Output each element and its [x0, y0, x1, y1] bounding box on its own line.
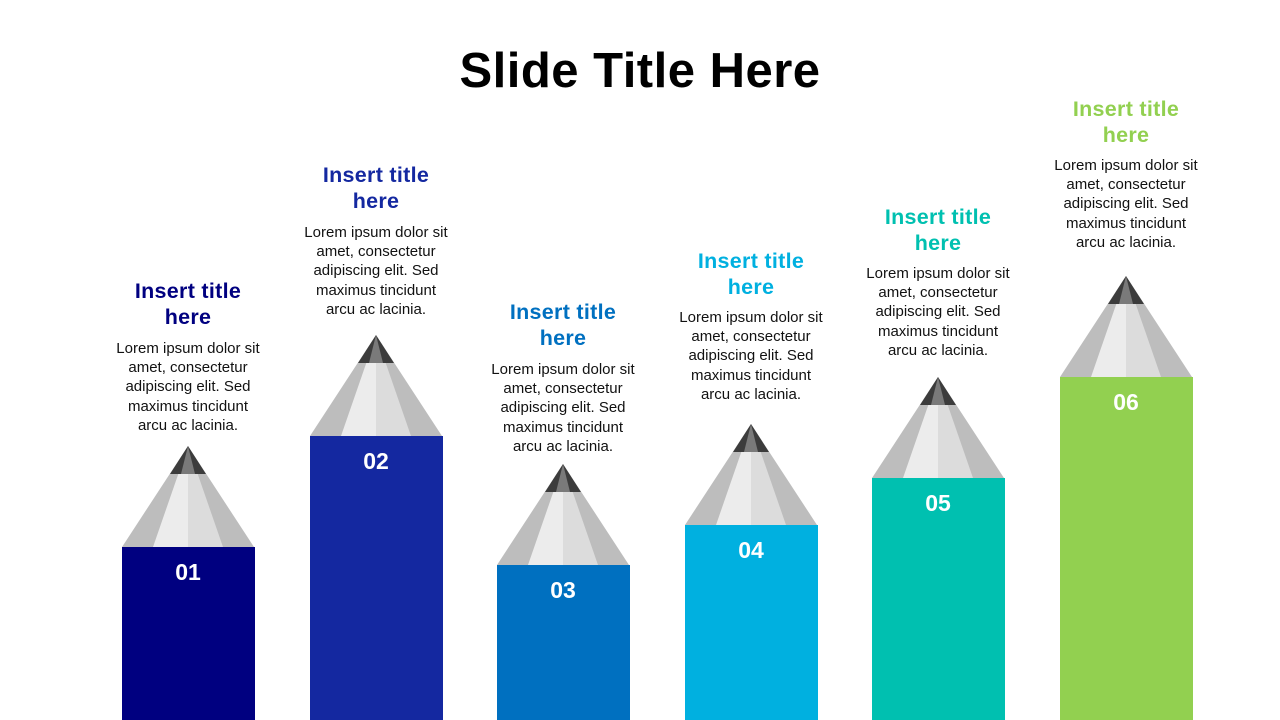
pencil 03 — [497, 464, 630, 720]
text block 01: amet, consectetur — [128, 359, 248, 376]
text block 04: amet, consectetur — [691, 328, 811, 345]
text block 06: amet, consectetur — [1066, 176, 1186, 193]
text block 05: amet, consectetur — [878, 284, 998, 301]
pencil 02: 02 — [363, 448, 389, 474]
text block 04: adipiscing elit. Sed — [688, 347, 814, 364]
text block 02: maximus tincidunt — [316, 282, 437, 299]
pencil 06: 06 — [1113, 389, 1139, 415]
pencil 05 — [872, 377, 1005, 720]
text block 02: here — [353, 189, 399, 213]
text block 02 — [304, 163, 449, 318]
pencil 06 — [1060, 276, 1193, 720]
text block 05: adipiscing elit. Sed — [875, 303, 1001, 320]
text block 06: Lorem ipsum dolor sit — [1054, 157, 1199, 174]
pencil 05: 05 — [925, 490, 951, 516]
text block 04: Lorem ipsum dolor sit — [679, 309, 824, 326]
text block 03: amet, consectetur — [503, 380, 623, 397]
pencil 03: 03 — [550, 577, 576, 603]
pencil 02 — [310, 335, 443, 720]
text block 01: here — [165, 305, 211, 329]
text block 01: maximus tincidunt — [128, 398, 249, 415]
text block 01: arcu ac lacinia. — [138, 417, 238, 434]
text block 05: arcu ac lacinia. — [888, 342, 988, 359]
text block 03: here — [540, 326, 586, 350]
text block 04: arcu ac lacinia. — [701, 386, 801, 403]
pencil 04: 04 — [738, 537, 764, 563]
title: Slide Title Here — [459, 44, 821, 98]
pencil 01 — [122, 446, 255, 720]
text block 02: Insert title — [323, 163, 429, 187]
text block 05 — [866, 205, 1011, 359]
text block 02: adipiscing elit. Sed — [313, 262, 439, 279]
text block 03: arcu ac lacinia. — [513, 438, 613, 455]
text block 05: maximus tincidunt — [878, 323, 999, 340]
icon: pencil tip 01 — [122, 446, 254, 547]
text block 06: adipiscing elit. Sed — [1063, 195, 1189, 212]
text block 06: maximus tincidunt — [1066, 215, 1187, 232]
text block 06 — [1054, 97, 1199, 251]
text block 06: here — [1103, 123, 1149, 147]
text block 01: adipiscing elit. Sed — [125, 378, 251, 395]
text block 03: adipiscing elit. Sed — [500, 399, 626, 416]
text block 04 — [679, 249, 824, 403]
text block 03 — [491, 300, 636, 455]
text block 01 — [116, 279, 261, 434]
text block 06: arcu ac lacinia. — [1076, 234, 1176, 251]
text block 01: Lorem ipsum dolor sit — [116, 340, 261, 357]
text block 01: Insert title — [135, 279, 241, 303]
text block 03: Insert title — [510, 300, 616, 324]
text block 05: Insert title — [885, 205, 991, 229]
text block 02: amet, consectetur — [316, 243, 436, 260]
text block 06: Insert title — [1073, 97, 1179, 121]
text block 03: maximus tincidunt — [503, 419, 624, 436]
text block 05: here — [915, 231, 961, 255]
text block 04: here — [728, 275, 774, 299]
pencil 01: 01 — [175, 559, 201, 585]
text block 02: arcu ac lacinia. — [326, 301, 426, 318]
text block 04: Insert title — [698, 249, 804, 273]
text block 02: Lorem ipsum dolor sit — [304, 224, 449, 241]
text block 04: maximus tincidunt — [691, 367, 812, 384]
text block 05: Lorem ipsum dolor sit — [866, 265, 1011, 282]
text block 03: Lorem ipsum dolor sit — [491, 361, 636, 378]
pencil 04 — [685, 424, 818, 720]
